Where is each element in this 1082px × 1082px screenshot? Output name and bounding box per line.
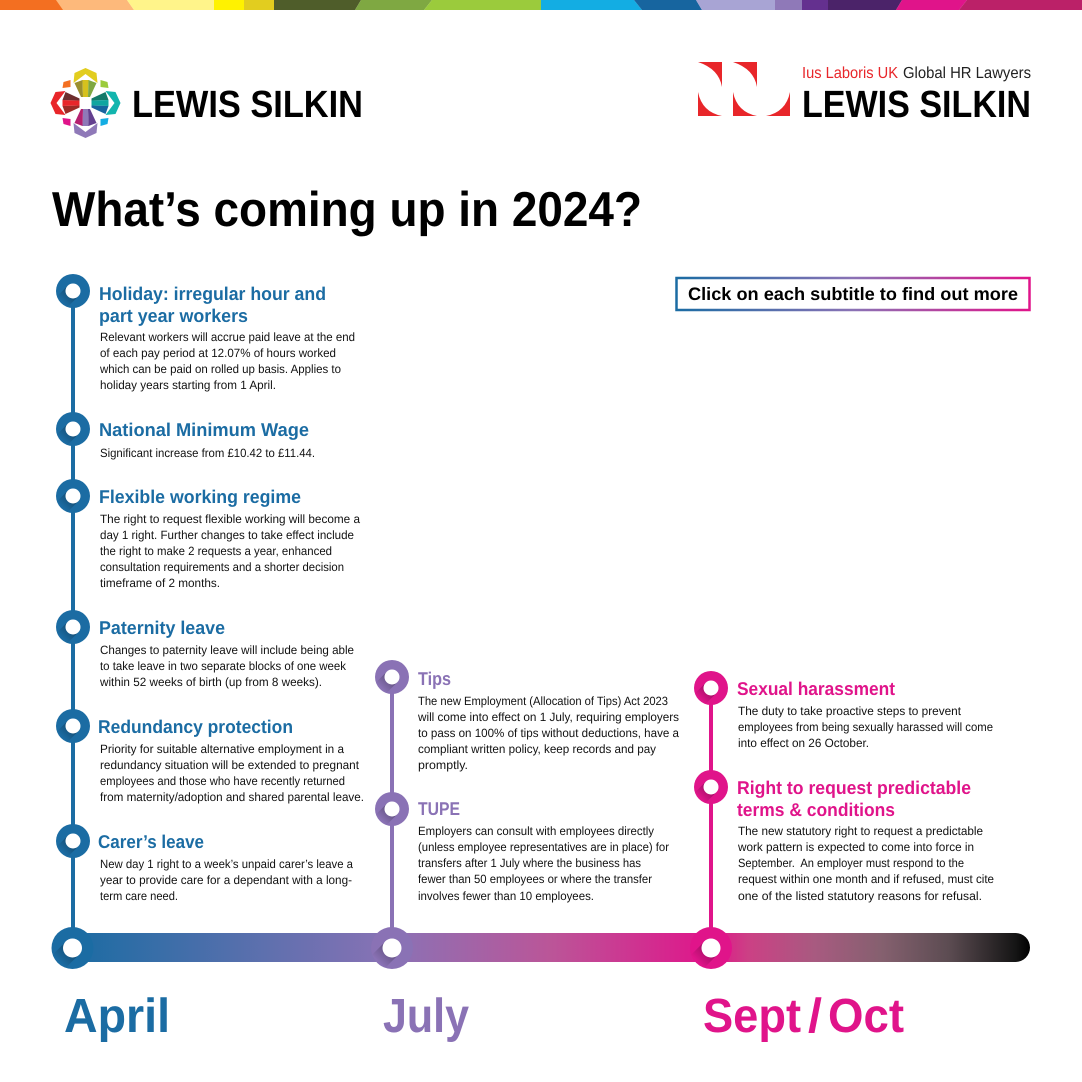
left logo: Lewis Silkin multi-colour mark and wordmark (50, 68, 363, 138)
item: Right to request predictable terms & conditions (686, 770, 994, 903)
item: Paternity leave (48, 610, 354, 689)
body text: compliant written policy, keep records and pay (418, 742, 656, 756)
item: Flexible working regime (48, 479, 360, 590)
ring marker (367, 792, 409, 834)
icon: kaleidoscope mark (50, 68, 120, 138)
body text (100, 742, 364, 804)
body text: from maternity/adoption and shared parental leave. (100, 790, 364, 804)
body text: involves fewer than 10 employees. (418, 889, 594, 903)
body text (418, 824, 669, 903)
top colour band (0, 0, 1082, 10)
body text: timeframe of 2 months. (100, 576, 220, 590)
body text: Significant increase from £10.42 to £11.44. (100, 446, 315, 460)
callout: click on each subtitle (676, 278, 1030, 310)
body text: one of the listed statutory reasons for refusal. (738, 889, 982, 903)
month label: April: April (64, 990, 170, 1043)
heading: Right to request predictable (737, 777, 971, 798)
body text: redundancy situation will be extended to pregnant (100, 758, 360, 772)
right logo: Ius Laboris UK Global HR Lawyers, Lewis Silkin: Global HR Lawyers (903, 65, 1031, 82)
body text (737, 824, 994, 903)
heading: Sexual harassment (737, 678, 895, 699)
body text: employees and those who have recently returned (100, 774, 345, 788)
month label: July: July (383, 990, 469, 1043)
timeline vertical connector: Sept/Oct (709, 688, 713, 948)
ring marker (48, 610, 90, 652)
body text: New day 1 right to a week’s unpaid carer’s leave a (100, 857, 353, 871)
ring marker (48, 274, 90, 316)
body text: holiday years starting from 1 April. (100, 378, 276, 392)
timeline vertical connector: July (390, 677, 394, 948)
Sept/Oct milestone marker (680, 927, 732, 979)
heading: Tips (418, 668, 451, 689)
body text: consultation requirements and a shorter decision (100, 560, 344, 574)
heading: TUPE (418, 798, 460, 819)
body text: fewer than 50 employees or where the transfer (418, 872, 652, 886)
body text: transfers after 1 July where the business has (418, 856, 641, 870)
body text: day 1 right. Further changes to take effect include (100, 528, 354, 542)
ring marker (686, 770, 728, 812)
item: Tips (367, 660, 679, 772)
item: Sexual harassment (686, 671, 993, 750)
July milestone marker (361, 927, 413, 979)
body text (417, 694, 679, 772)
body text: Employers can consult with employees directly (418, 824, 654, 838)
body text (99, 330, 355, 392)
body text: (unless employee representatives are in place) for (418, 840, 669, 854)
icon: red curved squares (698, 62, 790, 116)
body text: to take leave in two separate blocks of one week (100, 659, 347, 673)
body text: The new Employment (Allocation of Tips) Act 2023 (418, 694, 668, 708)
body text (100, 512, 360, 590)
right logo: Ius Laboris UK Global HR Lawyers, Lewis Silkin (698, 62, 1031, 126)
month label: Sept / Oct: / (808, 990, 822, 1043)
body text: Changes to paternity leave will include being able (100, 643, 354, 657)
body text: term care need. (100, 889, 178, 903)
body text: Priority for suitable alternative employment in a (100, 742, 344, 756)
April milestone marker (41, 927, 93, 979)
body text (100, 857, 353, 903)
item: National Minimum Wage (48, 412, 315, 460)
body text: The right to request flexible working will become a (100, 512, 360, 526)
body text: promptly. (418, 758, 468, 772)
body text (99, 643, 354, 689)
body text: into effect on 26 October. (738, 736, 869, 750)
month label: Sept / Oct (703, 990, 904, 1043)
body text: work pattern is expected to come into force in (737, 840, 974, 854)
heading: Flexible working regime (99, 486, 301, 507)
item: Redundancy protection (48, 709, 364, 804)
body text: which can be paid on rolled up basis. Applies to (99, 362, 341, 376)
ring marker (48, 709, 90, 751)
wordmark: LEWIS SILKIN (802, 84, 1031, 126)
heading: Carer’s leave (98, 831, 204, 852)
body text: employees from being sexually harassed will come (738, 720, 993, 734)
body text: year to provide care for a dependant with a long- (100, 873, 352, 887)
heading: Redundancy protection (98, 716, 293, 737)
month label: Sept / Oct: Oct (828, 990, 904, 1043)
ring marker (48, 824, 90, 866)
body text: The duty to take proactive steps to prevent (738, 704, 962, 718)
body text: within 52 weeks of birth (up from 8 weeks). (99, 675, 322, 689)
item: TUPE (367, 792, 669, 903)
body text: Relevant workers will accrue paid leave at the end (100, 330, 355, 344)
heading: terms & conditions (737, 799, 895, 820)
body text: September. An employer must respond to the (738, 856, 964, 870)
timeline vertical connector: April (71, 291, 75, 948)
wordmark: LEWIS SILKIN (132, 84, 363, 126)
heading: Holiday: irregular hour and (99, 283, 326, 304)
ring marker (48, 412, 90, 454)
body text: the right to make 2 requests a year, enhanced (100, 544, 332, 558)
callout: click on each subtitle: Click on each subtitle to find out more (688, 284, 1018, 304)
ring marker (48, 479, 90, 521)
body text (738, 704, 993, 750)
body text: to pass on 100% of tips without deductions, have a (418, 726, 679, 740)
body text: will come into effect on 1 July, requiring employers (417, 710, 679, 724)
body text: request within one month and if refused, must cite (738, 872, 994, 886)
ring marker (367, 660, 409, 702)
timeline gradient bar (73, 933, 1030, 962)
item: Carer's leave (48, 824, 353, 903)
month label: Sept / Oct: Sept (703, 990, 801, 1043)
heading: Paternity leave (99, 617, 225, 638)
body text: The new statutory right to request a predictable (738, 824, 983, 838)
heading: part year workers (99, 305, 248, 326)
item: Holiday (48, 274, 355, 392)
body text: of each pay period at 12.07% of hours worked (100, 346, 336, 360)
tagline: Ius Laboris UK (802, 65, 898, 82)
heading: National Minimum Wage (99, 419, 309, 440)
ring marker (686, 671, 728, 713)
title: What’s coming up in 2024? (52, 183, 642, 237)
